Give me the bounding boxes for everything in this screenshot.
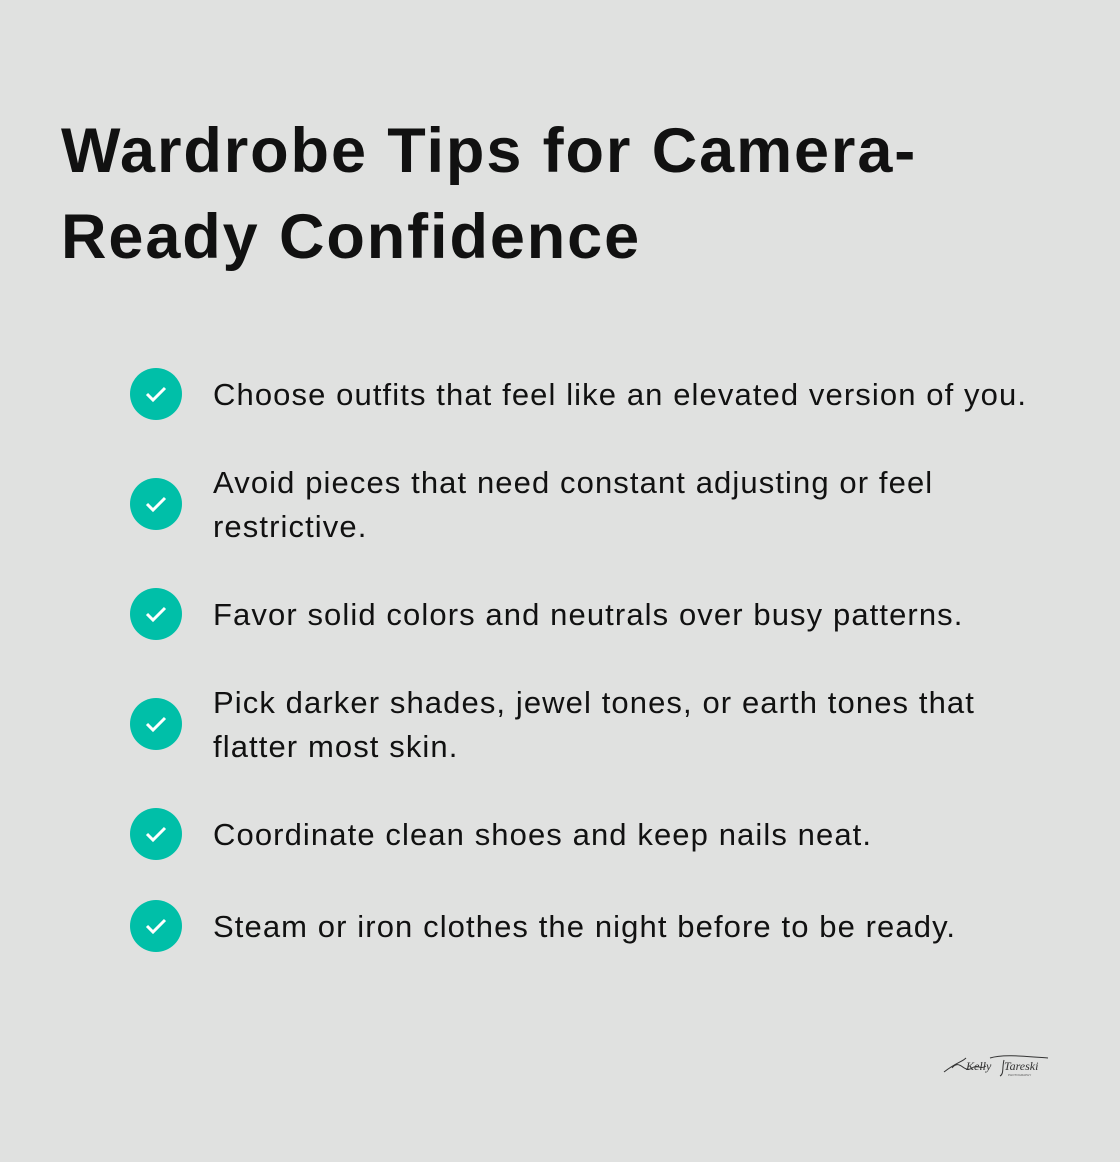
- signature logo: PHOTOGRAPHY: [1008, 1073, 1031, 1077]
- item 6: [130, 900, 956, 952]
- item 4: Pick darker shades, jewel tones, or earth tones that: [213, 685, 975, 720]
- item 2: [130, 465, 933, 544]
- item 5: Coordinate clean shoes and keep nails neat.: [213, 817, 872, 852]
- item 3: Favor solid colors and neutrals over busy patterns.: [213, 597, 964, 632]
- item 4: flatter most skin.: [213, 729, 458, 764]
- signature logo: Tareski: [1004, 1059, 1038, 1073]
- title: [61, 116, 917, 272]
- item 2: restrictive.: [213, 509, 367, 544]
- signature logo: Kelly: [965, 1059, 992, 1073]
- item 5: [130, 808, 872, 860]
- item 2: Avoid pieces that need constant adjusting or feel: [213, 465, 933, 500]
- title: Wardrobe Tips for Camera-: [61, 116, 917, 186]
- item 6: Steam or iron clothes the night before to be ready.: [213, 909, 956, 944]
- item 1: Choose outfits that feel like an elevated version of you.: [213, 377, 1027, 412]
- item 3: [130, 588, 964, 640]
- item 4: [130, 685, 975, 764]
- title: Ready Confidence: [61, 202, 641, 272]
- signature logo: [944, 1055, 1048, 1077]
- item 1: [130, 368, 1027, 420]
